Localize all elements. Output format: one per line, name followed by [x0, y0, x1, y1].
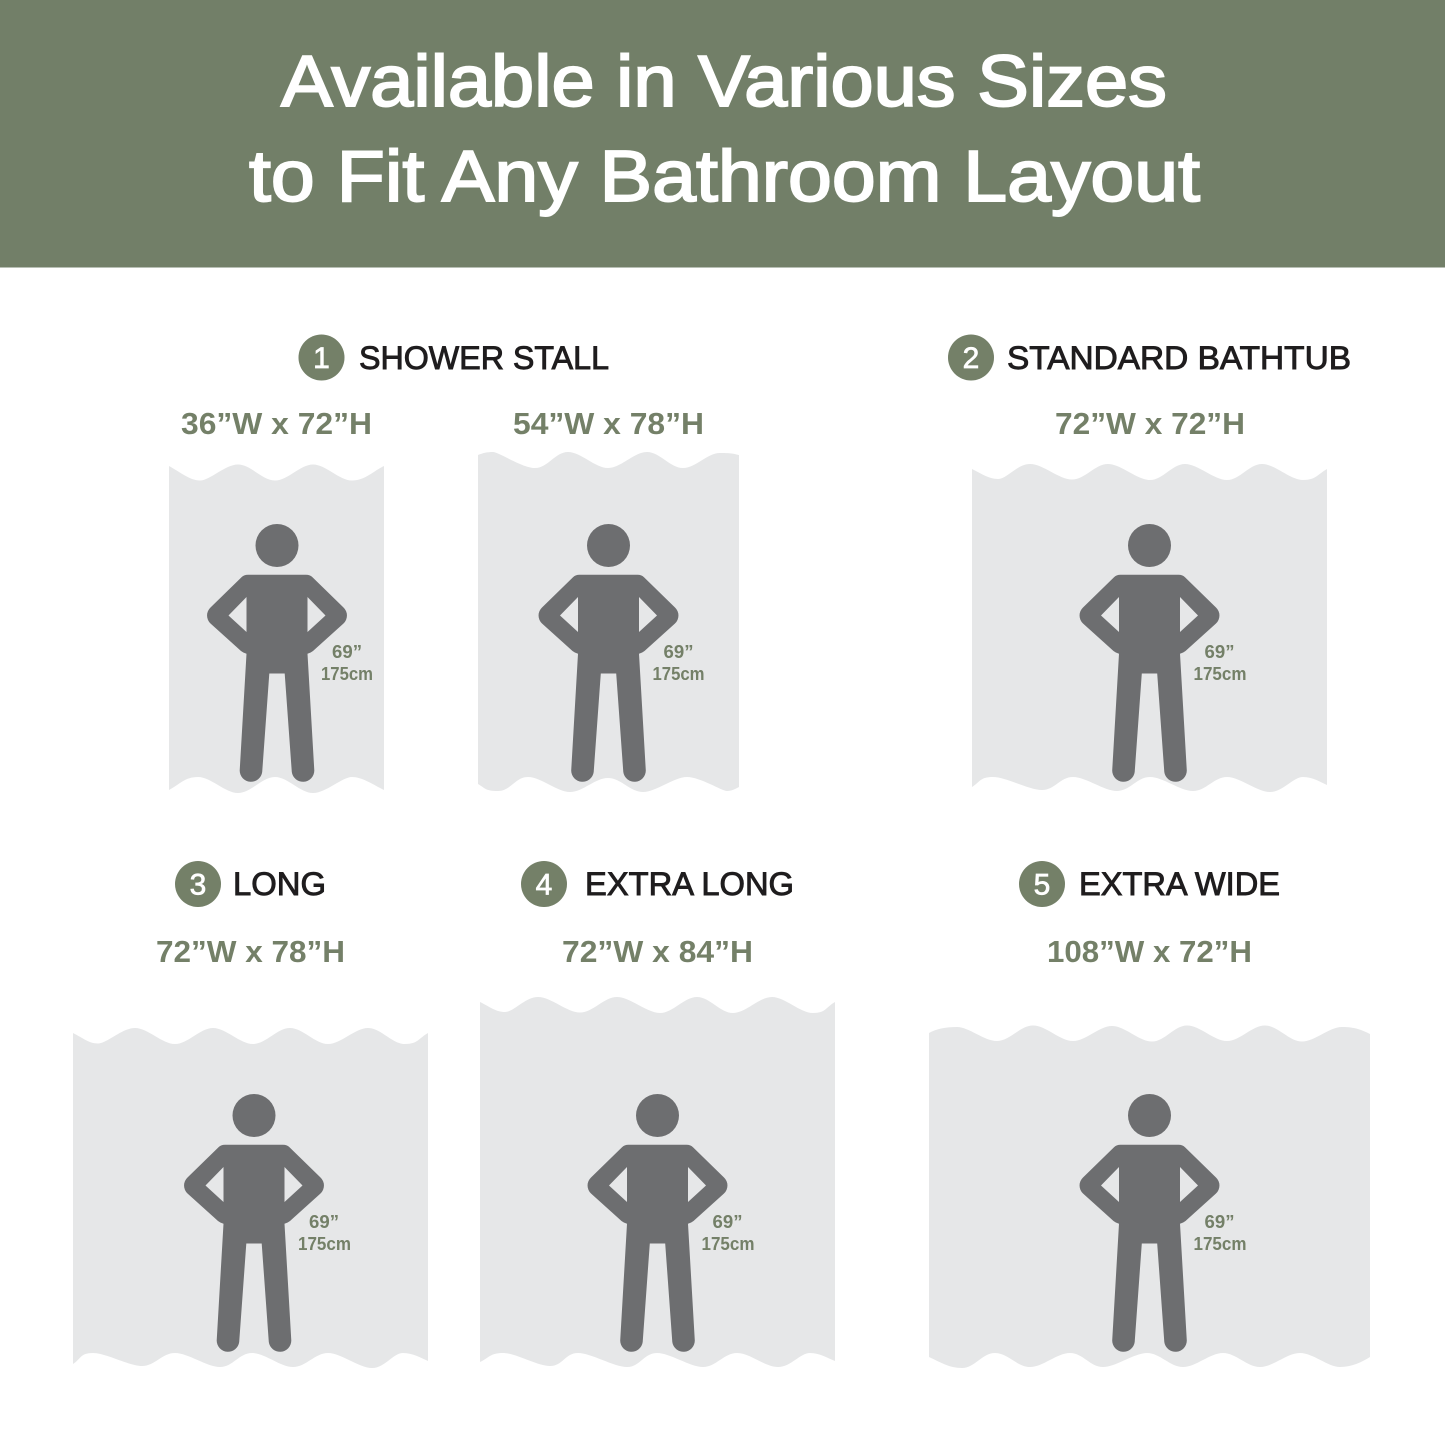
icon: person [588, 1094, 727, 1352]
heading: 2 standard bathtub [948, 334, 1351, 380]
height label: 175cm [652, 664, 704, 684]
height label [321, 642, 373, 684]
height label: 175cm [321, 664, 373, 684]
size label: 72W x 72H: 72”W x 72”H [1055, 406, 1245, 441]
icon: person [1080, 524, 1219, 782]
height label: 175cm [702, 1234, 754, 1254]
panel: 54W x 78H curtain [478, 452, 739, 792]
size label: 108W x 72H: 108”W x 72”H [1047, 934, 1252, 969]
height label [702, 1212, 754, 1254]
heading: 1 shower stall [298, 334, 609, 380]
heading: 2 standard bathtub: 2 [963, 342, 979, 375]
icon: person [207, 524, 347, 782]
height label: 175cm [298, 1234, 351, 1254]
title: to Fit Any Bathroom Layout [249, 137, 1200, 217]
heading: 5 extra wide: EXTRA WIDE [1079, 866, 1280, 902]
height label [1194, 1212, 1246, 1254]
height label: 69” [1204, 1212, 1234, 1232]
height label: 69” [664, 642, 694, 662]
heading: 1 shower stall: SHOWER STALL [359, 340, 609, 376]
panel: standard bathtub curtain [972, 464, 1327, 792]
panel: extra long curtain [480, 997, 835, 1367]
title [249, 42, 1200, 217]
height label: 175cm [1194, 664, 1246, 684]
height label [298, 1212, 351, 1254]
size label: 72W x 78H: 72”W x 78”H [156, 934, 345, 969]
heading: 1 shower stall: 1 [313, 342, 330, 375]
height label: 69” [332, 642, 362, 662]
height label: 69” [1204, 642, 1234, 662]
panel: extra wide curtain [929, 1026, 1370, 1368]
heading: 4 extra long: EXTRA LONG [585, 866, 794, 902]
panel: 36W x 72H curtain [169, 464, 384, 793]
heading: 3 long [175, 861, 326, 907]
size label: 54W x 78H: 54”W x 78”H [513, 406, 704, 441]
height label: 69” [309, 1212, 339, 1232]
heading: 3 long: 3 [190, 868, 206, 902]
height label [652, 642, 704, 684]
heading: 2 standard bathtub: STANDARD BATHTUB [1007, 340, 1351, 376]
heading: 5 extra wide: 5 [1034, 868, 1050, 902]
heading: 3 long: LONG [233, 866, 326, 902]
header banner [0, 0, 1445, 268]
size label: 72W x 84H: 72”W x 84”H [562, 934, 753, 969]
height label: 175cm [1194, 1234, 1246, 1254]
height label: 69” [712, 1212, 742, 1232]
heading: 4 extra long: 4 [536, 868, 552, 902]
height label [1194, 642, 1246, 684]
heading: 4 extra long [521, 861, 794, 907]
size label: 36W x 72H: 36”W x 72”H [181, 406, 372, 441]
heading: 5 extra wide [1019, 861, 1280, 907]
icon: person [539, 524, 678, 782]
icon: person [1080, 1094, 1219, 1352]
title: Available in Various Sizes [281, 42, 1167, 122]
panel: long curtain [73, 1028, 428, 1368]
icon: person [184, 1094, 324, 1352]
